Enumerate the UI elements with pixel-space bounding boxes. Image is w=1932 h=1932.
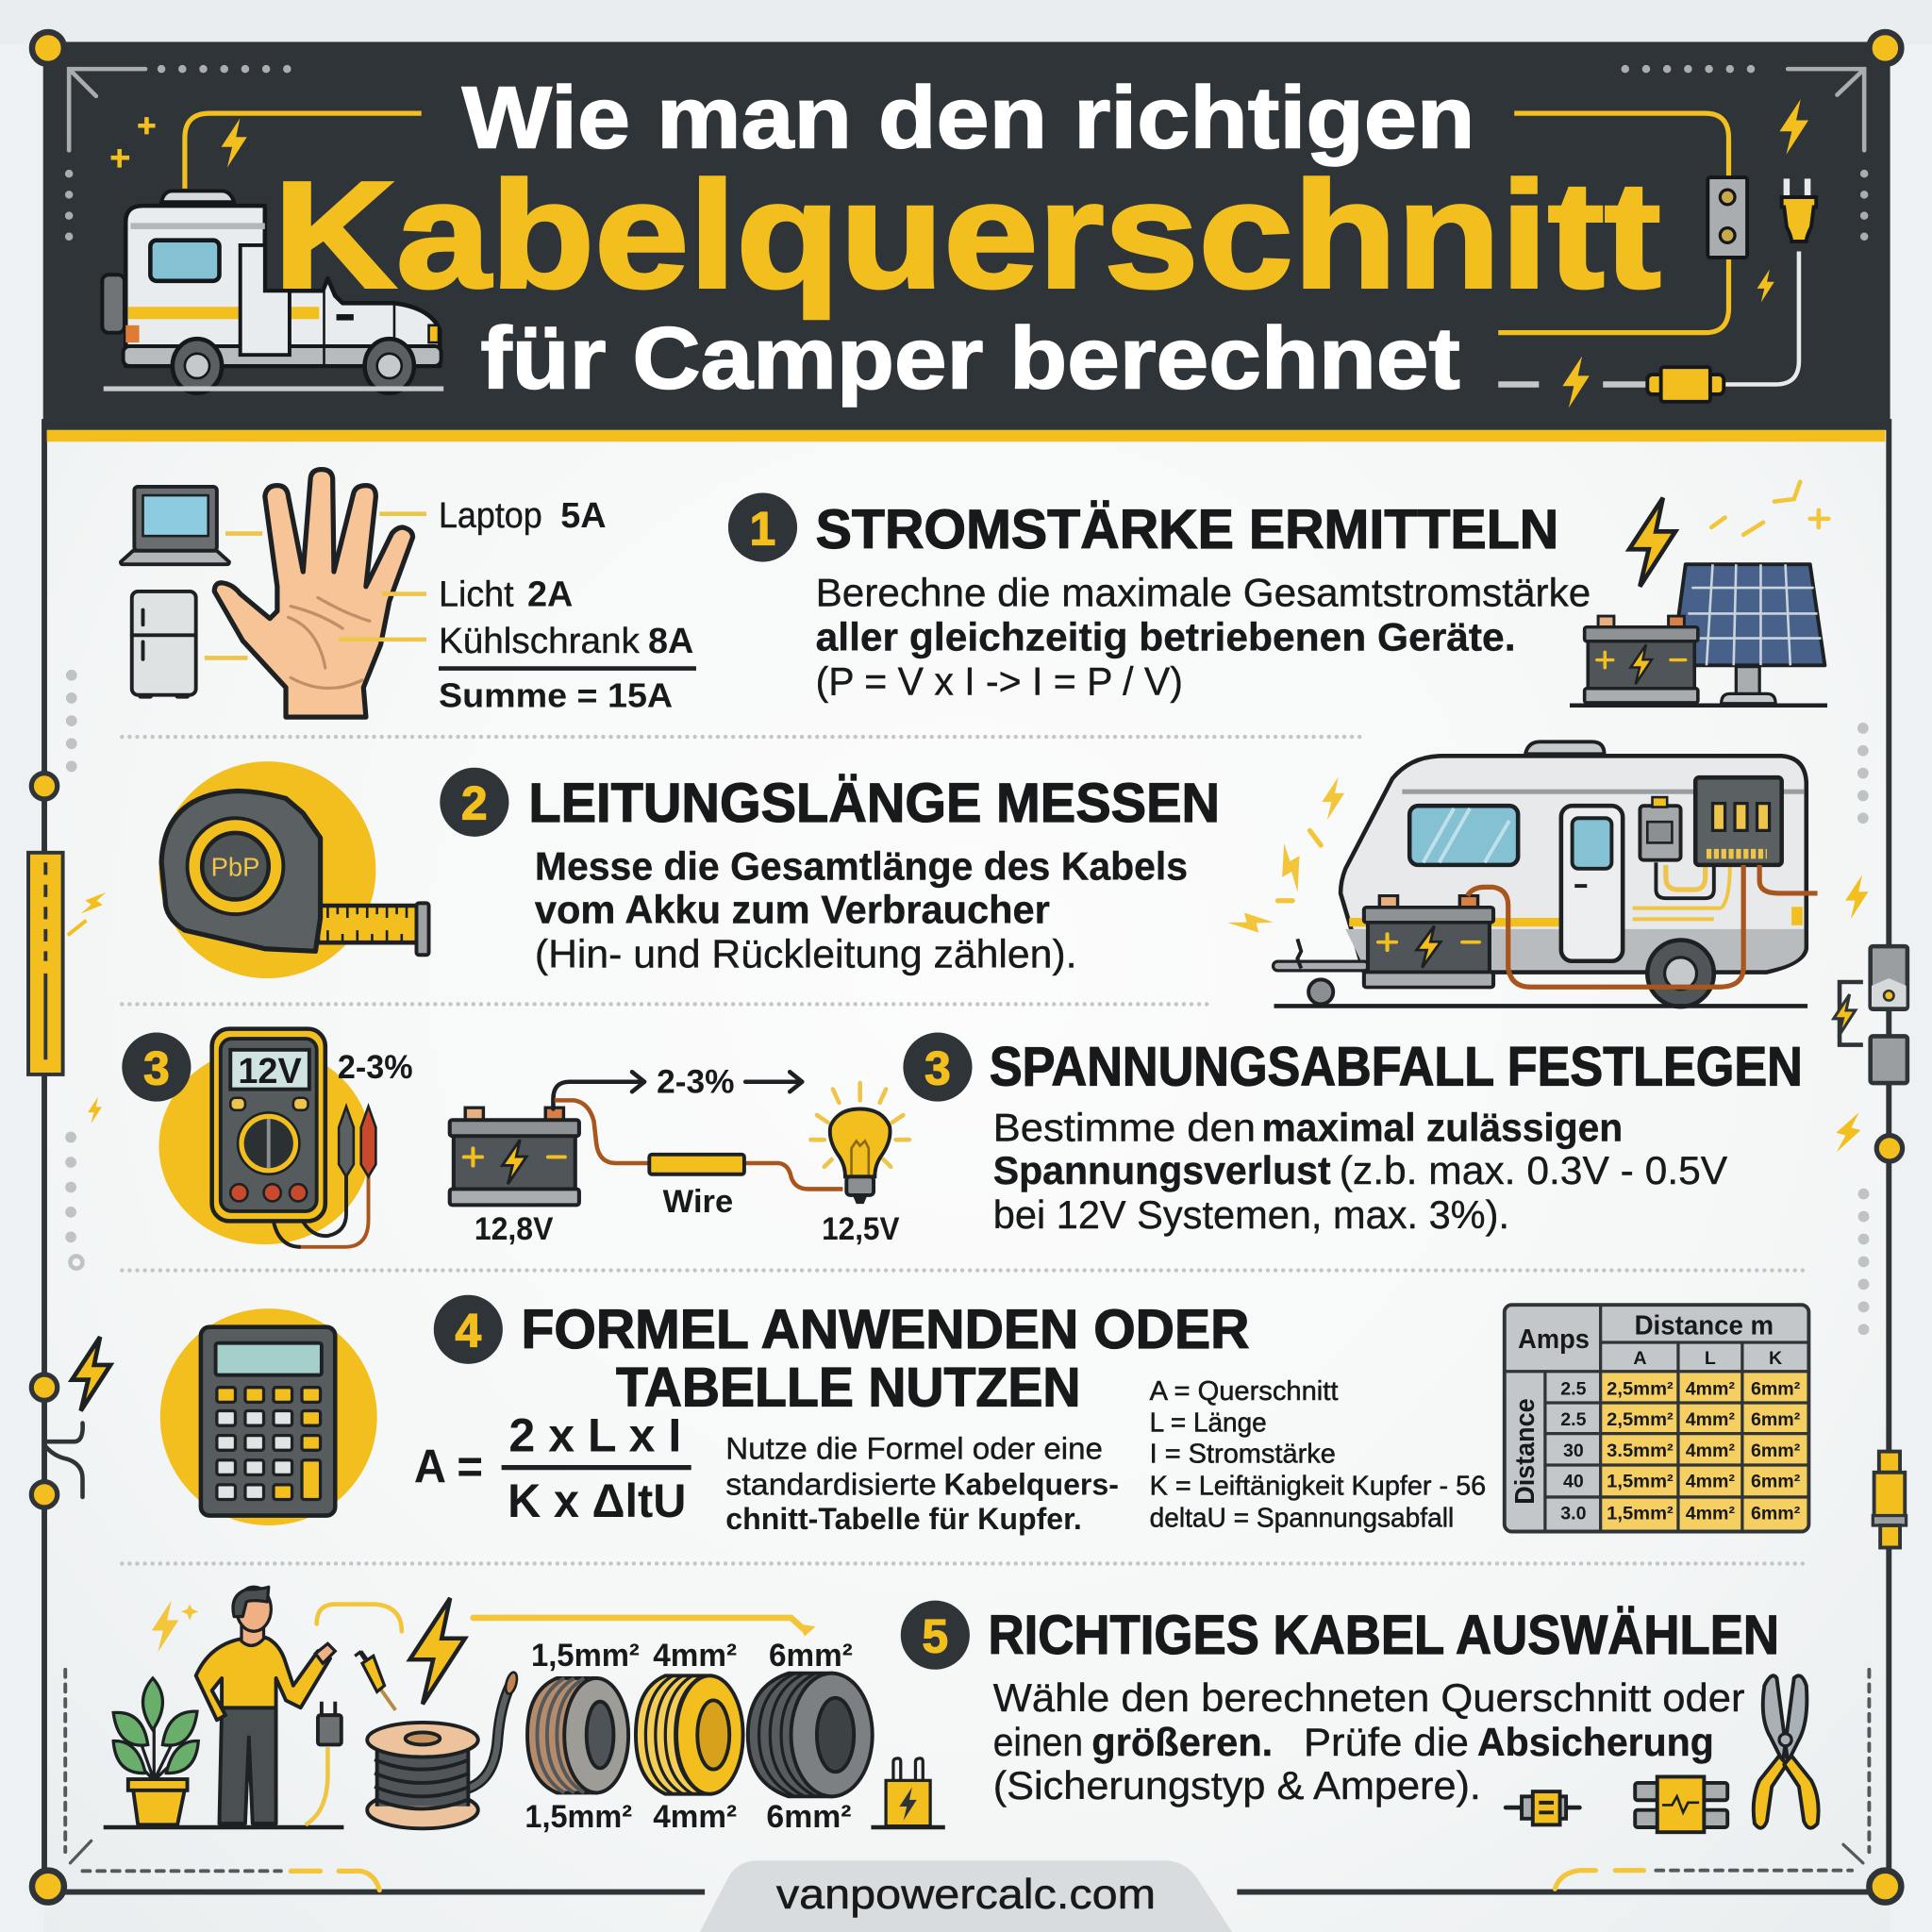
icon: laptop — [121, 487, 229, 564]
formula key: A = Querschnitt — [1150, 1376, 1338, 1407]
badge 3 right — [903, 1033, 973, 1102]
text 4 — [725, 1430, 1119, 1536]
table: 2.5 — [1560, 1379, 1587, 1400]
circuit diagram — [450, 1064, 909, 1247]
corner bracket right — [1625, 69, 1864, 258]
table: Distance — [1510, 1398, 1541, 1505]
table: Distance m — [1635, 1311, 1774, 1341]
badge 4 — [434, 1295, 503, 1364]
text 3: (z.b. max. 0.3V - 0.5V — [1340, 1148, 1727, 1192]
text 5: Prüfe die — [1304, 1720, 1469, 1764]
right cable, connector, plug and fuse — [1498, 99, 1816, 408]
table: 2,5mm² — [1607, 1409, 1674, 1430]
text 3: Bestimme den — [993, 1105, 1256, 1149]
circuit diagram: 12,5V — [822, 1211, 900, 1247]
table: 4mm² — [1686, 1379, 1735, 1400]
formula key: deltaU = Spannungsabfall — [1150, 1503, 1454, 1533]
badge 4: 4 — [456, 1305, 482, 1357]
icon: yellow coil — [636, 1675, 743, 1794]
text 1: (P = V x I -> I = P / V) — [816, 659, 1183, 704]
table: 6mm² — [1751, 1379, 1801, 1400]
left side spark and branches — [45, 1096, 110, 1497]
formula: 2 x L x I — [508, 1409, 681, 1462]
badge 2 — [440, 768, 508, 837]
icon: pliers — [1754, 1675, 1819, 1828]
formula: K x ΔltU — [508, 1474, 687, 1527]
table: K — [1769, 1348, 1782, 1369]
table: 2,5mm² — [1607, 1379, 1674, 1400]
divider — [122, 1003, 1211, 1006]
right side connectors and sparks — [1831, 874, 1907, 1547]
section 4: formula — [160, 1295, 1808, 1536]
title: Kabelquerschnitt — [274, 151, 1661, 320]
coil labels: 4mm² — [653, 1799, 737, 1835]
circuit diagram: Wire — [663, 1184, 733, 1220]
divider — [122, 1269, 1808, 1272]
icon: cable spool — [367, 1671, 519, 1828]
heading 3: SPANNUNGSABFALL FESTLEGEN — [990, 1037, 1803, 1098]
bottom corner ornaments — [65, 1670, 1869, 1890]
table: 1,5mm² — [1607, 1471, 1674, 1491]
text 5: (Sicherungstyp & Ampere). — [993, 1763, 1481, 1807]
icon: grey coil — [748, 1674, 873, 1796]
icon: multimeter — [158, 1029, 375, 1247]
text 5: größeren. — [1091, 1720, 1273, 1764]
text 1: Berechne die maximale Gesamtstromstärke — [816, 571, 1591, 615]
table: 4mm² — [1686, 1503, 1735, 1524]
divider — [122, 735, 1365, 739]
text 3: maximal zulässigen — [1261, 1105, 1623, 1149]
text 4: Kabelquers- — [943, 1466, 1119, 1501]
badge 3 left — [122, 1033, 191, 1102]
formula key — [1150, 1376, 1486, 1533]
divider — [122, 1562, 1808, 1565]
icon: plug with cable — [306, 1702, 341, 1824]
heading 4: FORMEL ANWENDEN ODER — [521, 1299, 1249, 1360]
text 1: aller gleichzeitig betriebenen Geräte. — [816, 615, 1516, 659]
icon: fridge — [132, 591, 196, 696]
formula key: K = Leiftänigkeit Kupfer - 56 — [1150, 1471, 1486, 1501]
table — [1505, 1305, 1808, 1532]
badge 3 right: 3 — [924, 1041, 951, 1094]
text 2 — [535, 844, 1188, 975]
heading 4 — [521, 1299, 1249, 1418]
table: 1,5mm² — [1607, 1503, 1674, 1524]
panel: header — [43, 42, 1890, 441]
text: loads: Summe = 15A — [439, 676, 673, 715]
icon: multimeter: 12V — [238, 1052, 302, 1091]
text: loads: Licht — [439, 575, 514, 615]
icon: tape measure: PbP — [211, 853, 259, 882]
table: L — [1705, 1348, 1716, 1369]
icon: calculator — [160, 1308, 377, 1525]
icon: camper van — [102, 191, 443, 393]
section 5: choose cable — [104, 1587, 1819, 1835]
badge 5 — [901, 1601, 970, 1670]
text: loads: Kühlschrank — [439, 622, 640, 661]
section 3: voltage drop — [122, 1029, 1803, 1247]
table: 40 — [1563, 1471, 1584, 1491]
text 4: standardisierte — [725, 1466, 937, 1501]
table: 6mm² — [1751, 1441, 1801, 1461]
text 3 — [993, 1105, 1727, 1237]
table: A — [1633, 1348, 1647, 1369]
badge 3 left: 3 — [143, 1041, 170, 1094]
table: 30 — [1563, 1441, 1584, 1461]
ground line — [104, 1825, 343, 1829]
formula key: I = Stromstärke — [1150, 1439, 1336, 1469]
icon: caravan with battery and cables — [1226, 741, 1818, 1007]
badge 1: 1 — [750, 502, 775, 555]
icon: tape measure — [158, 761, 429, 978]
text 4: Nutze die Formel oder eine — [725, 1430, 1103, 1465]
table: 6mm² — [1751, 1471, 1801, 1491]
text 5: Absicherung — [1477, 1720, 1714, 1764]
website tab — [700, 1860, 1232, 1932]
icon: plant — [113, 1678, 198, 1824]
heading 4: TABELLE NUTZEN — [616, 1357, 1080, 1418]
coil labels: 6mm² — [769, 1638, 853, 1674]
text 1 — [816, 571, 1591, 704]
table: 6mm² — [1751, 1503, 1801, 1524]
title: für Camper berechnet — [480, 308, 1460, 407]
heading 1: STROMSTÄRKE ERMITTELN — [816, 499, 1558, 560]
table: 2.5 — [1560, 1409, 1587, 1430]
table: 4mm² — [1686, 1409, 1735, 1430]
section 1: current — [121, 470, 1828, 717]
table: 3.5mm² — [1607, 1441, 1674, 1461]
text 4: chnitt-Tabelle für Kupfer. — [725, 1501, 1082, 1536]
coil labels — [525, 1638, 853, 1835]
coil labels: 1,5mm² — [525, 1799, 632, 1835]
corner bracket left — [69, 69, 308, 258]
table: 4mm² — [1686, 1441, 1735, 1461]
icon: charger — [871, 1758, 945, 1827]
circuit diagram: 12,8V — [475, 1211, 554, 1247]
frame lines — [44, 419, 1889, 1892]
icon: light bulb — [810, 1083, 909, 1204]
coil labels: 4mm² — [653, 1638, 737, 1674]
callout lines — [205, 514, 426, 658]
section 2: length — [158, 741, 1818, 1007]
text: loads: 2A — [527, 575, 573, 615]
title — [274, 69, 1661, 407]
left yellow cable and sparks — [111, 113, 422, 189]
formula — [414, 1409, 691, 1527]
text: loads: 8A — [648, 622, 693, 661]
formula key: L = Länge — [1150, 1408, 1267, 1439]
badge 1 — [728, 492, 797, 562]
left side fuse bar — [28, 853, 109, 1074]
text 5 — [993, 1675, 1745, 1807]
title: Wie man den richtigen — [462, 69, 1474, 167]
heading 5: RICHTIGES KABEL AUSWÄHLEN — [989, 1605, 1779, 1666]
icon: solar panel and battery — [1570, 482, 1828, 706]
text: loads: 5A — [560, 496, 607, 536]
text: loads — [439, 496, 696, 715]
text: loads: Laptop — [439, 496, 542, 536]
coil labels: 1,5mm² — [531, 1638, 640, 1674]
text 5: einen — [993, 1720, 1083, 1764]
website tab: vanpowercalc.com — [776, 1872, 1156, 1918]
icon: sparks and cables — [152, 1598, 816, 1710]
text 3: Spannungsverlust — [993, 1148, 1331, 1192]
text 2: (Hin- und Rückleitung zählen). — [535, 931, 1077, 975]
table: Amps — [1518, 1324, 1590, 1355]
table: 3.0 — [1560, 1503, 1587, 1524]
icon: person — [196, 1587, 335, 1824]
formula: A = — [414, 1440, 483, 1492]
text 2: Messe die Gesamtlänge des Kabels — [535, 844, 1188, 889]
badge 2: 2 — [461, 777, 488, 830]
heading 2: LEITUNGSLÄNGE MESSEN — [528, 773, 1220, 834]
icon: copper coil — [527, 1678, 628, 1792]
table: 6mm² — [1751, 1409, 1801, 1430]
text 2: vom Akku zum Verbraucher — [535, 887, 1050, 931]
icon: hand — [214, 470, 413, 717]
circuit diagram: 2-3% — [657, 1064, 734, 1101]
icon: fuse — [1506, 1791, 1579, 1824]
coil labels: 6mm² — [766, 1799, 852, 1835]
text 5: Wähle den berechneten Querschnitt oder — [993, 1675, 1745, 1720]
text 3: bei 12V Systemen, max. 3%). — [993, 1192, 1509, 1237]
badge 5: 5 — [923, 1610, 948, 1663]
icon: fuse block — [1635, 1776, 1727, 1832]
table: 4mm² — [1686, 1471, 1735, 1491]
label: 2-3%: 2-3% — [338, 1049, 413, 1086]
